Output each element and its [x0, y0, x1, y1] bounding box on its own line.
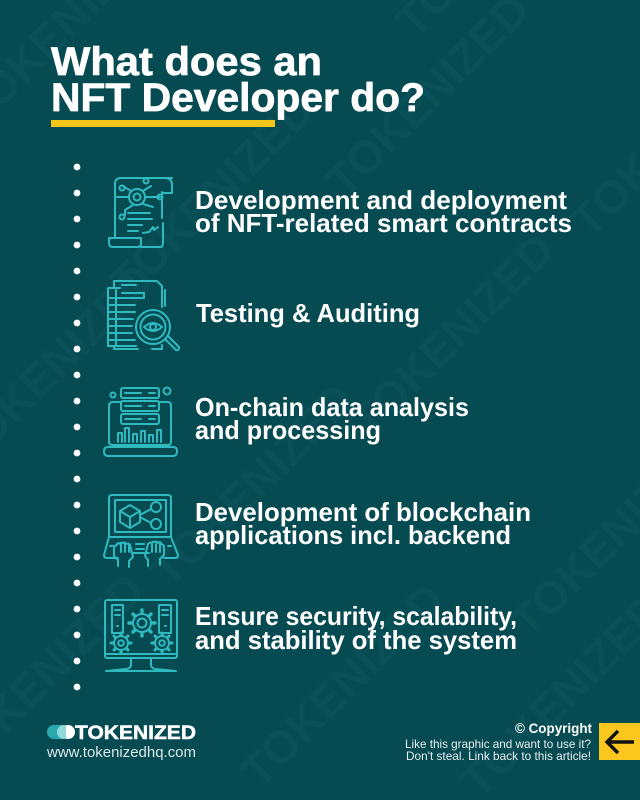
title	[51, 40, 425, 120]
title: NFT Developer do?	[51, 76, 425, 120]
text: item 3: On-chain data analysis	[195, 392, 469, 422]
copyright note: © Copyright	[515, 721, 592, 736]
text: TOKENIZED	[100, 83, 324, 307]
copyright note: Don't steal. Link back to this article!	[406, 749, 591, 763]
text: item 1	[195, 185, 572, 238]
arrow badge	[599, 723, 640, 760]
copyright note: Like this graphic and want to use it?	[405, 737, 591, 751]
text: item 1: of NFT-related smart contracts	[195, 208, 572, 238]
icon: data server analytics	[104, 388, 177, 456]
icon: document audit magnifier	[108, 281, 179, 350]
text: item 2: Testing & Auditing	[196, 298, 420, 328]
icon: laptop with cube network	[104, 495, 178, 567]
text: item 5	[195, 601, 517, 655]
text: item 3: and processing	[195, 415, 381, 445]
text: item 5: and stability of the system	[195, 625, 517, 655]
logo mark	[47, 725, 75, 739]
text: item 4: Development of blockchain	[195, 497, 531, 527]
text: item 5: Ensure security, scalability,	[195, 601, 517, 631]
icon: monitor with gears	[105, 600, 177, 671]
text: item 3	[195, 392, 469, 445]
text: TOKENIZED	[230, 573, 454, 797]
text: item 4: applications incl. backend	[195, 520, 511, 550]
title underline	[51, 120, 275, 127]
text: item 4	[195, 497, 531, 550]
logo wordmark: TOKENIZED	[75, 722, 196, 744]
icon: smart contract scroll	[109, 178, 172, 247]
dotted timeline	[74, 164, 80, 690]
website url: www.tokenizedhq.com	[46, 744, 196, 761]
copyright note	[405, 721, 592, 763]
text: TOKENIZED	[140, 373, 364, 597]
text: TOKENIZED	[340, 223, 564, 447]
text: item 1: Development and deployment	[195, 185, 567, 215]
title: What does an	[51, 40, 322, 84]
